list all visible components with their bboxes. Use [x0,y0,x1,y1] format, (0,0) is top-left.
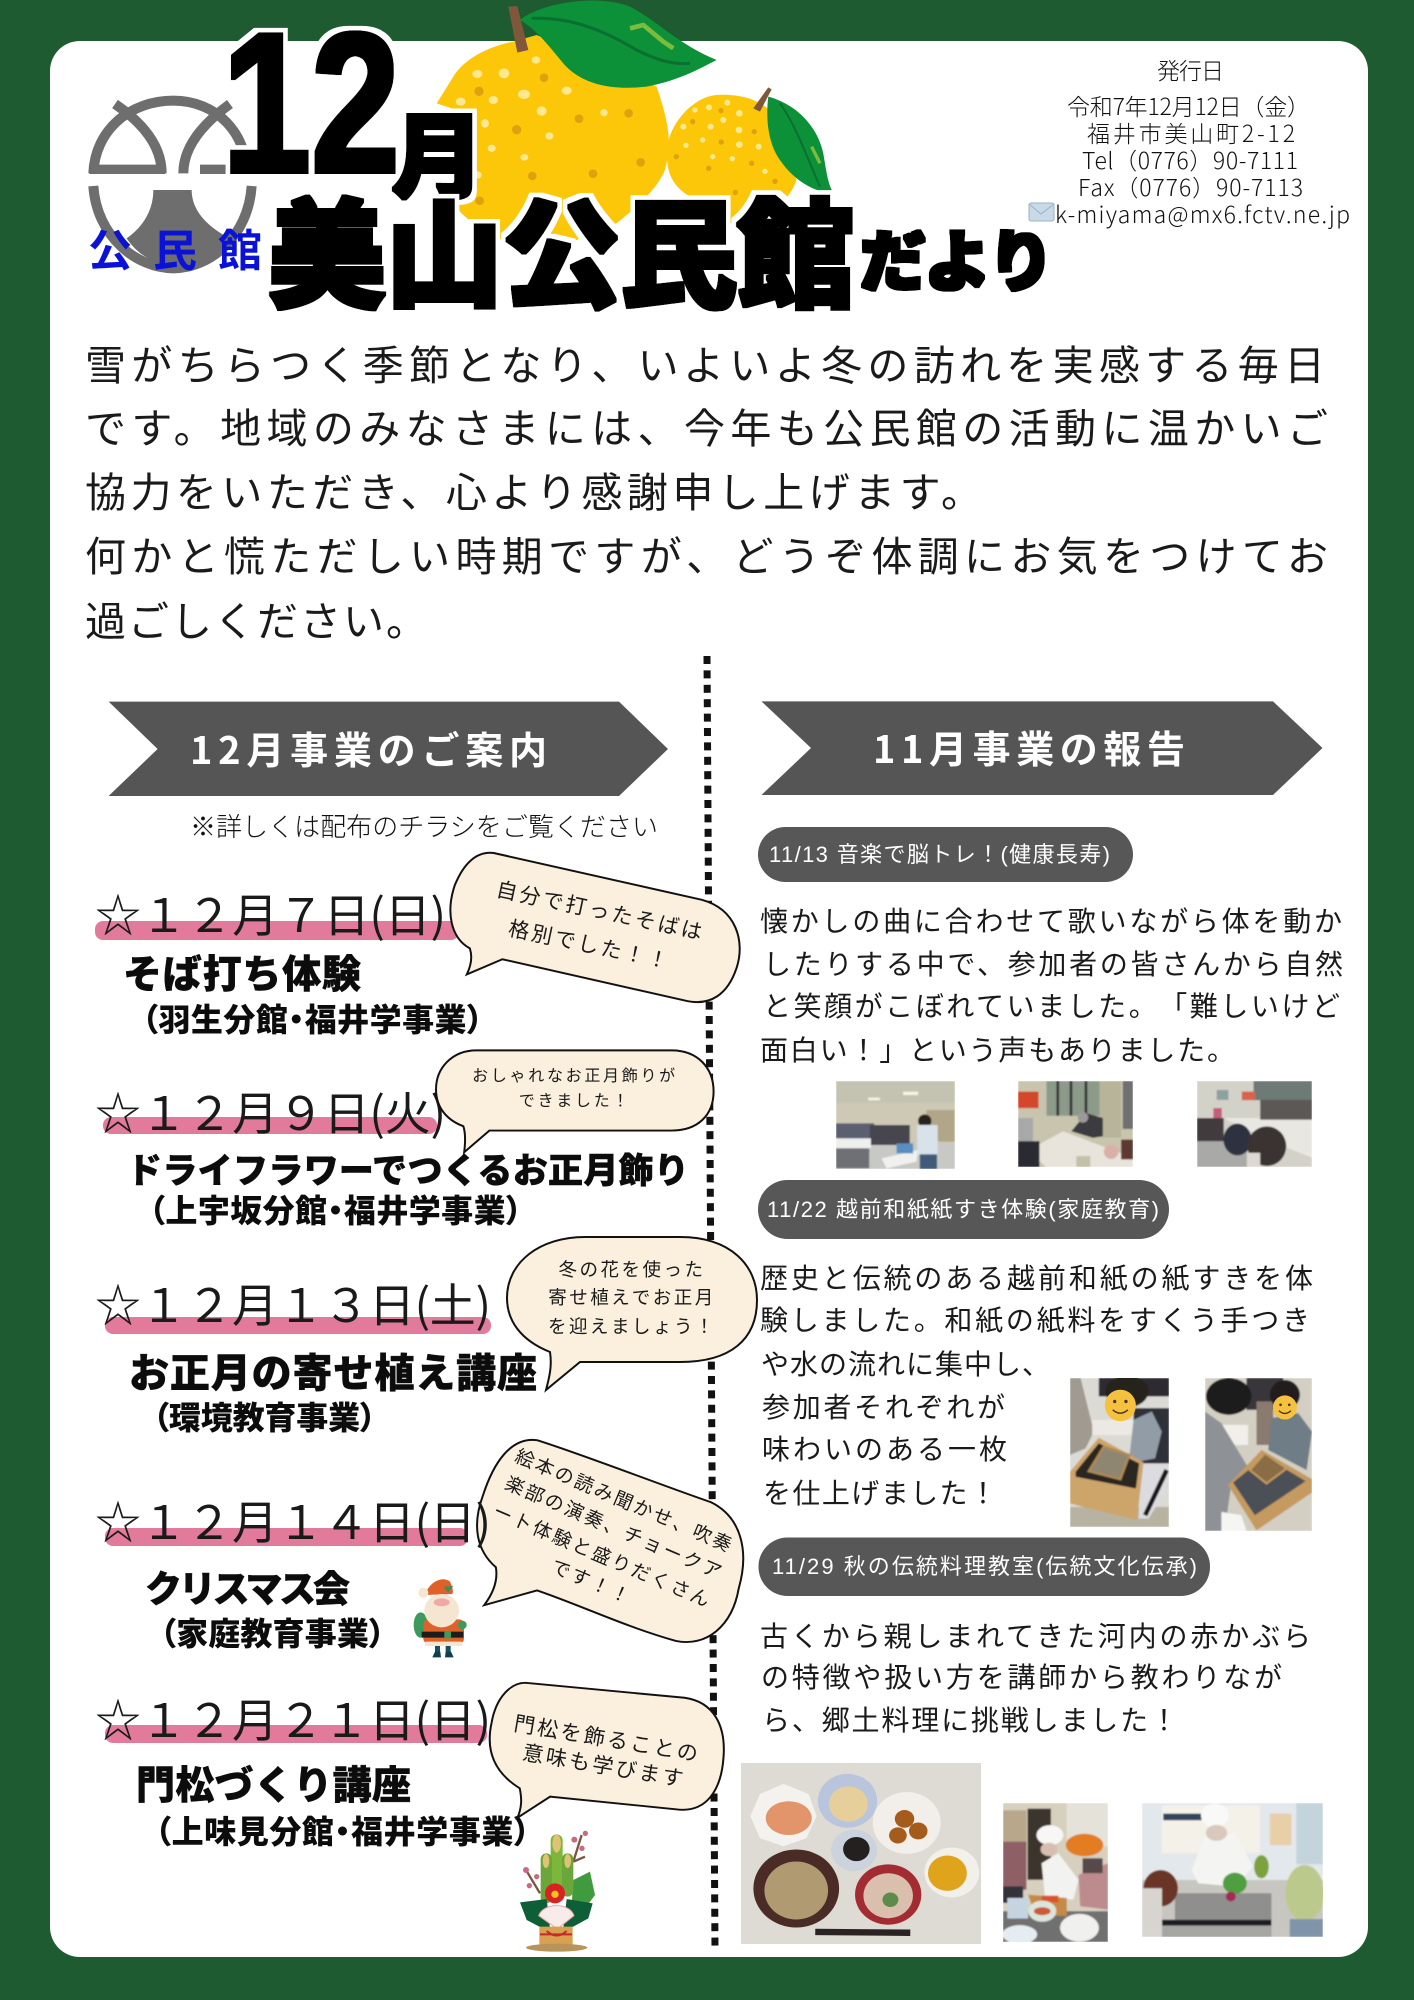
greeting text: 過ごしください。 [85,588,427,648]
report text: 11/29 [760,1615,1311,1739]
report text: 11/29: 古くから親しまれてきた河内の赤かぶら [760,1615,1311,1655]
emoji [1273,1395,1297,1420]
photo: cooking 2 [1142,1803,1323,1937]
dotted divider [707,656,715,1950]
small leaf [767,97,835,195]
event: Dec 7: ☆１２月７日(日) [95,880,446,946]
event: Dec 9: ☆１２月９日(火) [95,1078,446,1144]
greeting text: 協力をいただき、心より感謝申し上げます。 [85,459,982,519]
speech bubble: new year decoration: できました！ [519,1087,631,1111]
speech bubble: soba: 自分で打ったそばは [494,873,708,947]
pill heading: 11/13: 11/13 音楽で脳トレ！(健康長寿) [769,842,1110,867]
speech bubble: Christmas: 絵本の読み聞かせ、吹奏 [511,1442,739,1559]
title: 美山公民館だより: だより [860,209,1054,305]
label: 公民館: 公民館 [88,215,262,279]
report text: 11/22: 味わいのある一枚 [762,1428,1007,1468]
icon: kadomatsu [520,1831,595,1952]
publication info [1029,52,1350,230]
speech bubble: Christmas [477,1440,743,1642]
big leaf [520,0,717,88]
title: 12月: 月 [392,84,484,217]
report text: 11/22: 験しました。和紙の紙料をすくう手つき [760,1299,1310,1339]
icon: santa [414,1579,467,1657]
speech bubble: kadomatsu: 意味も学びます [520,1737,688,1794]
note: ※詳しくは配布のチラシをご覧ください [190,807,658,844]
speech bubble: winter flowers: 冬の花を使った [558,1256,706,1282]
photo: autumn dishes [741,1763,981,1944]
report text: 11/29: ら、郷土料理に挑戦しました！ [762,1699,1178,1739]
event: Dec 7 [95,880,483,1041]
speech bubble: winter flowers [507,1237,757,1390]
event: Dec 7: （羽生分館・福井学事業） [142,995,483,1041]
publication info: k-miyama@mx6.fctv.ne.jp [1055,196,1350,230]
report text: 11/13 [760,900,1343,1069]
photo: music session 1 [836,1081,955,1169]
publication info: 福井市美山町2-12 [1087,115,1295,149]
event: Dec 9: ドライフラワーでつくるお正月飾り [127,1143,689,1194]
photo: music session 2 [1018,1081,1133,1167]
event: Dec 14 [95,1487,491,1655]
pill heading: 11/13 [758,827,1133,882]
event: Dec 13: （環境教育事業） [153,1393,376,1439]
event: Dec 14: クリスマス会 [145,1559,350,1613]
title: 美山公民館だより: 美山公民館 [268,161,855,332]
speech bubble: Christmas: ート体験と盛りだくさん [489,1497,717,1614]
report text: 11/13: 懐かしの曲に合わせて歌いながら体を動か [760,900,1342,940]
pill heading: 11/29 [758,1538,1210,1596]
publication info: 発行日 [1157,52,1224,86]
event: Dec 7: そば打ち体験 [123,944,361,1000]
photo: cooking 1 [1003,1803,1108,1942]
pill heading: 11/22: 11/22 越前和紙紙すき体験(家庭教育) [767,1197,1159,1222]
emoji [1105,1390,1136,1421]
banner: December events [109,702,668,796]
illustration: yuzu fruits [437,0,835,253]
report text: 11/22: 歴史と伝統のある越前和紙の紙すきを体 [760,1257,1313,1297]
event: Dec 13 [95,1270,537,1439]
report text: 11/22: 参加者それぞれが [762,1386,1005,1426]
publication info: 令和7年12月12日（金） [1067,88,1310,122]
greeting text [85,332,1328,648]
event: Dec 13: ☆１２月１３日(土) [95,1270,491,1336]
event: Dec 9: （上宇坂分館・福井学事業） [149,1186,522,1232]
report text: 11/13: と笑顔がこぼれていました。「難しいけど [763,985,1340,1025]
event: Dec 9 [95,1078,689,1232]
icon: community centre logo [89,101,252,268]
report text: 11/29: の特徴や扱い方を講師から教わりなが [761,1656,1282,1696]
speech bubble: kadomatsu [490,1683,724,1818]
report text: 11/13: したりする中で、参加者の皆さんから自然 [763,943,1343,983]
event: Dec 21 [95,1685,530,1853]
banner: December events: 12月事業のご案内 [190,720,547,775]
icon: envelope [1029,203,1054,221]
speech bubble: new year decoration [436,1050,714,1152]
speech bubble: winter flowers: を迎えましょう！ [548,1313,716,1339]
speech bubble: kadomatsu: 門松を飾ることの [512,1708,703,1769]
speech bubble: soba: 格別でした！！ [506,912,674,976]
speech bubble: new year decoration: おしゃれなお正月飾りが [472,1062,678,1086]
event: Dec 21: （上味見分館・福井学事業） [155,1807,530,1853]
big yuzu [437,6,669,253]
report text: 11/22: を仕上げました！ [763,1472,997,1512]
event: Dec 21: 門松づくり講座 [136,1755,411,1811]
photo: music session 3 [1197,1081,1312,1167]
publication info: Tel（0776）90-7111 [1082,142,1298,176]
event: Dec 13: お正月の寄せ植え講座 [129,1341,537,1399]
speech bubble: Christmas: です！！ [547,1552,637,1610]
event: Dec 21: ☆１２月２１日(日) [95,1685,491,1751]
banner: November report: 11月事業の報告 [873,719,1185,774]
event: Dec 14: ☆１２月１４日(日) [95,1487,491,1553]
pill heading: 11/22 [758,1180,1169,1239]
small yuzu [667,87,797,223]
report text: 11/13: 面白い！」という声もありました。 [760,1029,1235,1069]
event: Dec 14: （家庭教育事業） [160,1609,385,1655]
speech bubble: winter flowers: 寄せ植えでお正月 [548,1284,716,1310]
pill heading: 11/29: 11/29 秋の伝統料理教室(伝統文化伝承) [772,1554,1197,1579]
publication info: Fax（0776）90-7113 [1078,169,1303,203]
greeting text: 雪がちらつく季節となり、いよいよ冬の訪れを実感する毎日 [85,332,1325,392]
photo: paper making 2 [1205,1378,1312,1531]
greeting text: です。地域のみなさまには、今年も公民館の活動に温かいご [85,395,1328,455]
report text: 11/22 [760,1257,1313,1512]
title: 12月 [222,0,484,217]
greeting text: 何かと慌ただしい時期ですが、どうぞ体調にお気をつけてお [85,523,1328,583]
photo: paper making 1 [1070,1378,1169,1527]
speech bubble: Christmas: 楽部の演奏、チョークア [501,1469,729,1586]
banner: November report [762,701,1322,795]
speech bubble: soba [450,853,740,1002]
report text: 11/22: や水の流れに集中し、 [761,1343,1050,1383]
